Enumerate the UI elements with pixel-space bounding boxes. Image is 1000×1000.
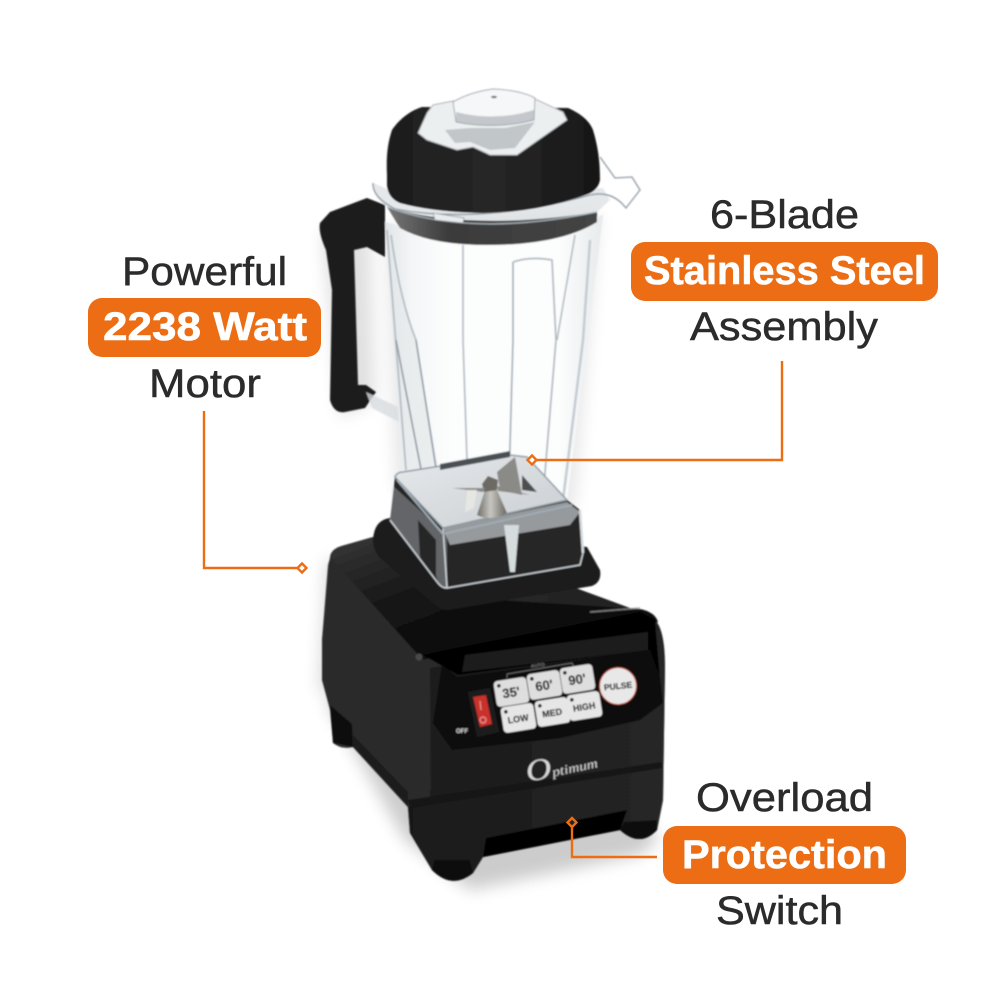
badge: 2238 Watt <box>88 298 321 357</box>
button: HIGH <box>566 691 603 721</box>
button: PULSE <box>598 666 638 706</box>
base front face <box>408 630 665 881</box>
leader line: motor <box>204 411 306 572</box>
callout: motor <box>88 250 321 572</box>
text: Switch: Switch <box>716 889 843 933</box>
control panel <box>423 612 663 750</box>
power switch <box>468 688 499 737</box>
upper collar square <box>395 455 567 528</box>
pitcher rim and spout <box>373 157 640 245</box>
clear lid insert <box>418 89 567 155</box>
auto bracket: AUTO <box>530 662 545 670</box>
soft shadow <box>318 205 660 890</box>
button: HIGH: HIGH <box>572 700 596 714</box>
blade assembly <box>477 490 507 518</box>
button: MED <box>534 697 571 727</box>
callout: blades <box>528 193 938 464</box>
jar base and blades <box>390 451 583 588</box>
off label: OFF <box>456 729 468 735</box>
leader line: protection <box>568 818 657 857</box>
badge text: 2238 Watt <box>103 305 307 349</box>
callout: protection <box>568 776 906 933</box>
blender lid <box>387 89 600 213</box>
heading line: Powerful: Powerful <box>122 250 287 294</box>
button: 90' <box>559 664 596 694</box>
leader line: blades <box>528 361 782 464</box>
button: LOW <box>500 703 537 733</box>
blender handle <box>320 198 405 425</box>
text: Motor: Motor <box>149 362 261 406</box>
button: 60': 60' <box>534 677 554 694</box>
translucent lower collar <box>390 477 583 588</box>
jar body <box>385 215 603 517</box>
badge: Protection <box>663 826 906 884</box>
brand name: Optimum <box>523 742 600 789</box>
blender photo <box>318 89 665 890</box>
button: 90': 90' <box>567 671 587 688</box>
badge text: Stainless Steel <box>644 249 925 293</box>
button: 60' <box>526 670 563 700</box>
button: 35' <box>493 677 530 707</box>
heading line: Overload: Overload <box>696 776 873 820</box>
auto bracket <box>507 662 574 678</box>
text: Assembly: Assembly <box>690 305 878 349</box>
blender base body <box>322 537 665 881</box>
rubber pad <box>373 518 600 610</box>
button: PULSE: PULSE <box>603 680 633 692</box>
button: 35': 35' <box>501 684 521 701</box>
button: MED: MED <box>541 706 563 719</box>
heading line: 6-Blade: 6-Blade <box>710 193 859 237</box>
button: LOW: LOW <box>507 712 530 726</box>
badge: Stainless Steel <box>631 242 938 301</box>
badge text: Protection <box>682 833 887 877</box>
base top surface <box>330 537 658 660</box>
